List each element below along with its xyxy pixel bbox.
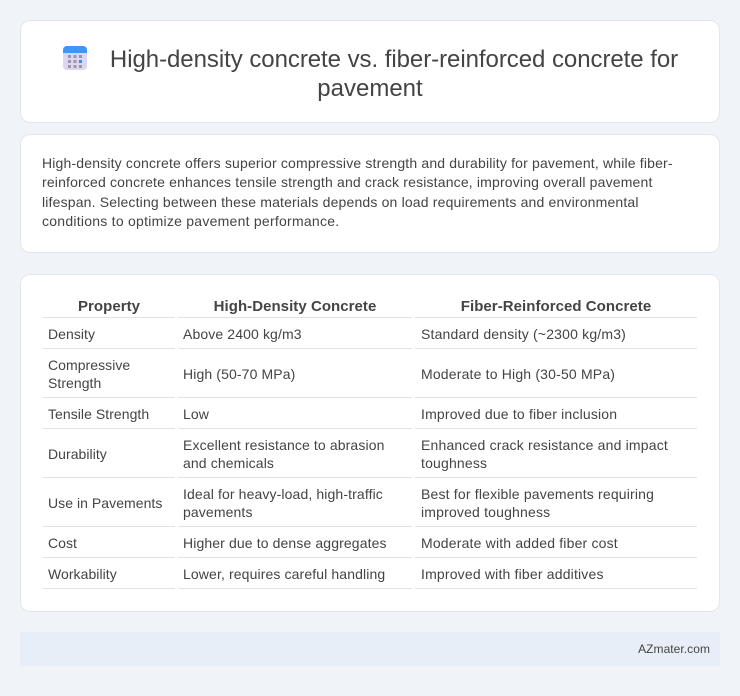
comparison table grid: pavements (183, 504, 253, 520)
comparison table grid: High (50-70 MPa) (183, 366, 295, 382)
comparison table grid: Tensile Strength (48, 406, 149, 422)
comparison table grid: Moderate with added fiber cost (421, 535, 618, 551)
comparison table grid: and chemicals (183, 455, 274, 471)
comparison table grid: improved toughness (421, 504, 550, 520)
comparison table grid: Best for flexible pavements requiring (421, 486, 654, 502)
panel: header card (20, 20, 720, 123)
comparison table grid: Compressive (48, 357, 130, 373)
intro text: conditions to optimize pavement performance. (42, 213, 339, 229)
comparison table grid: Strength (48, 375, 101, 391)
title line 1: High-density concrete vs. fiber-reinforced concrete for (110, 46, 678, 73)
comparison table grid: Cost (48, 535, 77, 551)
comparison table grid (43, 298, 697, 589)
comparison table grid: Workability (48, 566, 117, 582)
intro text: reinforced concrete enhances tensile strength and crack resistance, improving overall pavement (42, 174, 653, 190)
intro text: lifespan. Selecting between these materials depends on load requirements and environmental (42, 194, 639, 210)
comparison table grid: High-Density Concrete (214, 298, 376, 314)
intro text (42, 155, 673, 229)
comparison table grid: Fiber-Reinforced Concrete (461, 298, 651, 314)
comparison table grid: toughness (421, 455, 487, 471)
title line 2: pavement (317, 75, 423, 102)
comparison table grid: Durability (48, 446, 107, 462)
footer bar (20, 632, 720, 666)
comparison table grid: Moderate to High (30-50 MPa) (421, 366, 615, 382)
intro text: High-density concrete offers superior compressive strength and durability for pavement, while fiber- (42, 155, 673, 171)
comparison table grid: Ideal for heavy-load, high-traffic (183, 486, 383, 502)
comparison table grid: Excellent resistance to abrasion (183, 437, 385, 453)
footer credit: AZmater.com (638, 642, 710, 656)
comparison table grid: Lower, requires careful handling (183, 566, 385, 582)
comparison table grid: Improved with fiber additives (421, 566, 604, 582)
comparison table grid: Use in Pavements (48, 495, 162, 511)
comparison table grid: Enhanced crack resistance and impact (421, 437, 668, 453)
comparison table grid: Above 2400 kg/m3 (183, 326, 302, 342)
comparison table grid: Higher due to dense aggregates (183, 535, 387, 551)
comparison table grid: Standard density (~2300 kg/m3) (421, 326, 626, 342)
comparison table grid: Property (78, 298, 140, 314)
comparison table grid: Low (183, 406, 209, 422)
icon: calendar (63, 46, 87, 70)
panel: introduction (20, 134, 720, 253)
comparison table grid: Improved due to fiber inclusion (421, 406, 617, 422)
panel: comparison table (20, 274, 720, 612)
comparison table grid: Density (48, 326, 95, 342)
